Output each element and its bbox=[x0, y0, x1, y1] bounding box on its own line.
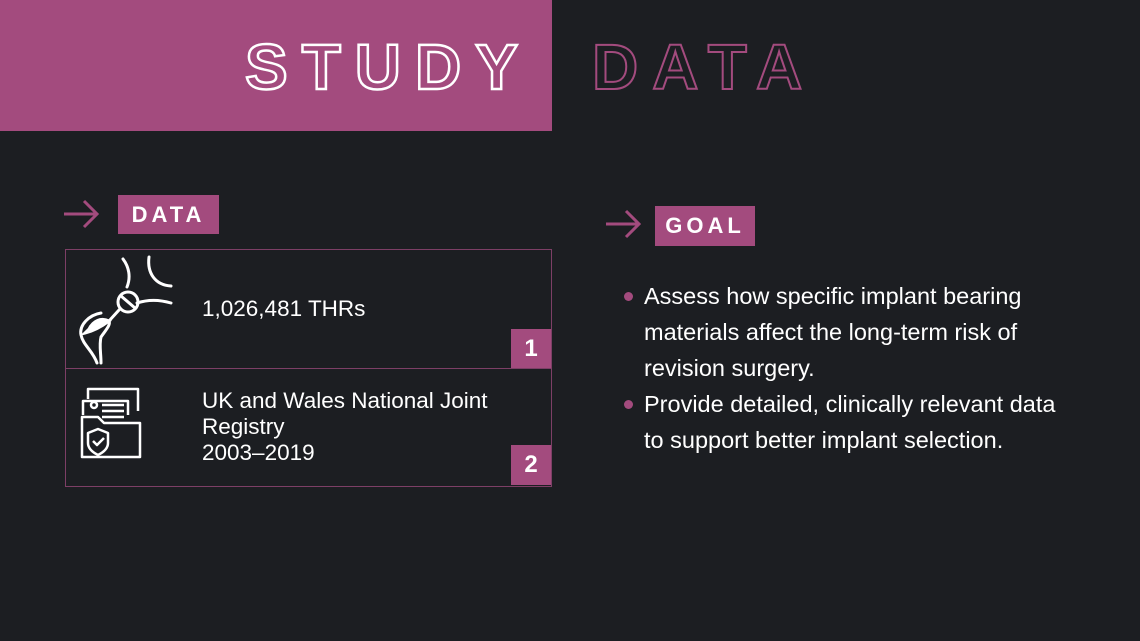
badge: 2: 2 bbox=[524, 451, 538, 478]
heading: DATA bbox=[118, 195, 219, 234]
badge: 1 bbox=[511, 329, 551, 369]
heading: DATA: DATA bbox=[132, 202, 205, 227]
heading: GOAL: GOAL bbox=[665, 213, 745, 238]
arrow: goal bbox=[606, 210, 641, 238]
panel: data item 2 bbox=[65, 368, 552, 487]
title banner bbox=[0, 0, 552, 131]
text block: goals bbox=[624, 283, 1056, 453]
bullet 1: Assess how specific implant bearing materials affect the long-term risk of revision surgery. bbox=[644, 283, 1021, 381]
icon: registry folder bbox=[80, 388, 142, 458]
heading: GOAL bbox=[655, 206, 755, 246]
panel: data item 1 bbox=[65, 249, 552, 369]
arrow: data bbox=[64, 200, 99, 228]
badge: 2 bbox=[511, 445, 551, 485]
icon: hip joint bbox=[79, 256, 172, 364]
text: registry: UK and Wales National Joint bbox=[202, 388, 488, 413]
text: registry: Registry bbox=[202, 414, 285, 439]
bullet 2: Provide detailed, clinically relevant data to support better implant selection. bbox=[644, 391, 1055, 453]
text: registry bbox=[202, 388, 488, 465]
text: registry: 2003–2019 bbox=[202, 440, 315, 465]
badge: 1: 1 bbox=[524, 335, 538, 362]
text: THR count: 1,026,481 THRs bbox=[202, 296, 365, 321]
